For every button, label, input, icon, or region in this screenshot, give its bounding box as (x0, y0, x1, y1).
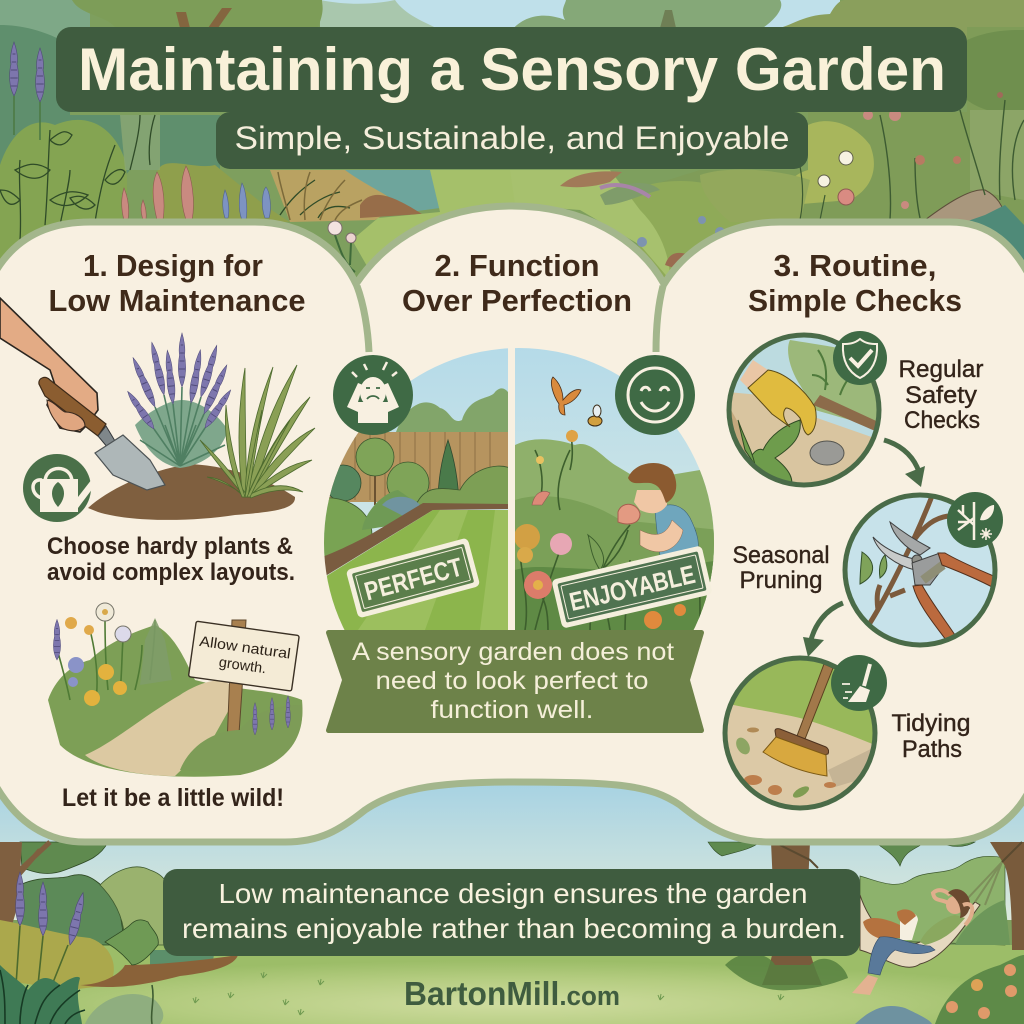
subtitle banner (216, 112, 808, 169)
divider between panels (509, 345, 514, 630)
banner: low maintenance summary (163, 869, 860, 956)
left hillside foliage (0, 25, 570, 290)
illustration: perfect garden half (320, 340, 720, 630)
sign: allow natural growth: growth. (218, 655, 267, 677)
icon: snowflake and leaf (947, 492, 1003, 548)
stamp: enjoyable (551, 545, 713, 629)
heading 3: Simple Checks (748, 283, 962, 318)
left plant line work (0, 115, 350, 240)
banner: a sensory garden: need to look perfect to (376, 667, 648, 695)
boy smelling a flower (628, 463, 698, 556)
text: tidying paths (892, 710, 970, 763)
icon: broom (831, 655, 887, 711)
heading 1: 1. Design for (83, 248, 263, 283)
banner: low maintenance summary: Low maintenance design ensures the garden (218, 878, 808, 909)
ornamental grass tuft (278, 172, 362, 220)
stamp: perfect: PERFECT (361, 552, 466, 606)
text: regular safety checks (898, 356, 984, 434)
illustration: safety check circle (725, 330, 885, 490)
text: seasonal pruning (732, 542, 830, 594)
text: regular safety checks: Checks (904, 407, 980, 434)
illustration: ornamental grass (200, 365, 315, 498)
text: seasonal pruning: Seasonal (732, 542, 830, 569)
sign: allow natural growth (188, 621, 299, 691)
text: choose hardy plants: Choose hardy plants & (47, 533, 293, 560)
banner: a sensory garden: A sensory garden does not (352, 638, 674, 666)
text: regular safety checks: Regular (898, 356, 984, 383)
pink spires (122, 166, 193, 220)
text: tidying paths: Paths (902, 736, 962, 763)
heading 1: Low Maintenance (48, 283, 306, 318)
illustration: tidying path circle (725, 658, 875, 810)
heading 1 (48, 248, 306, 318)
brand: bartonmill.com: BartonMill.com (404, 975, 620, 1012)
heading 3 (748, 248, 962, 318)
illustration: hand and trowel (0, 298, 165, 490)
meadow grass tufts (193, 972, 784, 1015)
bottom sky (0, 780, 1024, 920)
bottom right tree and hammock scene (708, 842, 1024, 1024)
heading 2: 2. Function (434, 248, 600, 283)
illustration: pruning circle (840, 490, 1000, 650)
top tree canopy and trunks (72, 0, 676, 28)
sign: allow natural growth: Allow natural (198, 634, 292, 663)
arrow: to pruning (884, 440, 925, 487)
text: choose hardy plants (47, 533, 295, 586)
text: let it be a little wild: Let it be a little wild! (62, 784, 284, 812)
icon: butterfly (551, 377, 581, 415)
banner: a sensory garden (326, 630, 704, 733)
right side flowers and stems (600, 92, 1024, 270)
arrow: to tidying (803, 603, 843, 657)
bottom meadow (0, 945, 1024, 1024)
right hillside foliage (510, 27, 1024, 285)
panel: 3 routine simple checks (725, 248, 1003, 810)
icon: smiling face (615, 355, 695, 435)
panel: cream scalloped background (0, 206, 1024, 842)
stamp: enjoyable: ENJOYABLE (566, 559, 698, 617)
banner: low maintenance summary: remains enjoyable rather than becoming a burden. (182, 913, 846, 944)
blue spires (223, 183, 270, 220)
heading 2: Over Perfection (402, 283, 632, 318)
icon: stressed person (333, 355, 413, 435)
text: tidying paths: Tidying (892, 710, 970, 737)
small flowers near centre notch (328, 221, 356, 272)
icon: watering can (23, 454, 100, 522)
illustration: wild path with sign (48, 603, 302, 777)
panel: 2 function over perfection (320, 248, 720, 733)
text: seasonal pruning: Pruning (740, 567, 822, 594)
icon: bee (588, 405, 602, 426)
heading 3: 3. Routine, (774, 248, 936, 283)
illustration: lavender plant (125, 333, 234, 468)
sky and distant trees at the top (0, 0, 1024, 45)
subtitle banner: Simple, Sustainable, and Enjoyable (234, 120, 790, 156)
banner: a sensory garden: function well. (430, 696, 594, 724)
text: regular safety checks: Safety (905, 382, 977, 409)
icon: top left lavender (10, 42, 44, 140)
text: choose hardy plants: avoid complex layouts. (47, 559, 295, 586)
title banner: Maintaining a Sensory Garden (78, 36, 946, 103)
soil mound (88, 464, 295, 520)
panel: 1 design for low maintenance (0, 248, 315, 812)
stamp: perfect (346, 538, 480, 618)
icon: shield check (833, 331, 887, 385)
bottom left shrubs and tree (0, 842, 238, 1024)
heading 2 (402, 248, 632, 318)
